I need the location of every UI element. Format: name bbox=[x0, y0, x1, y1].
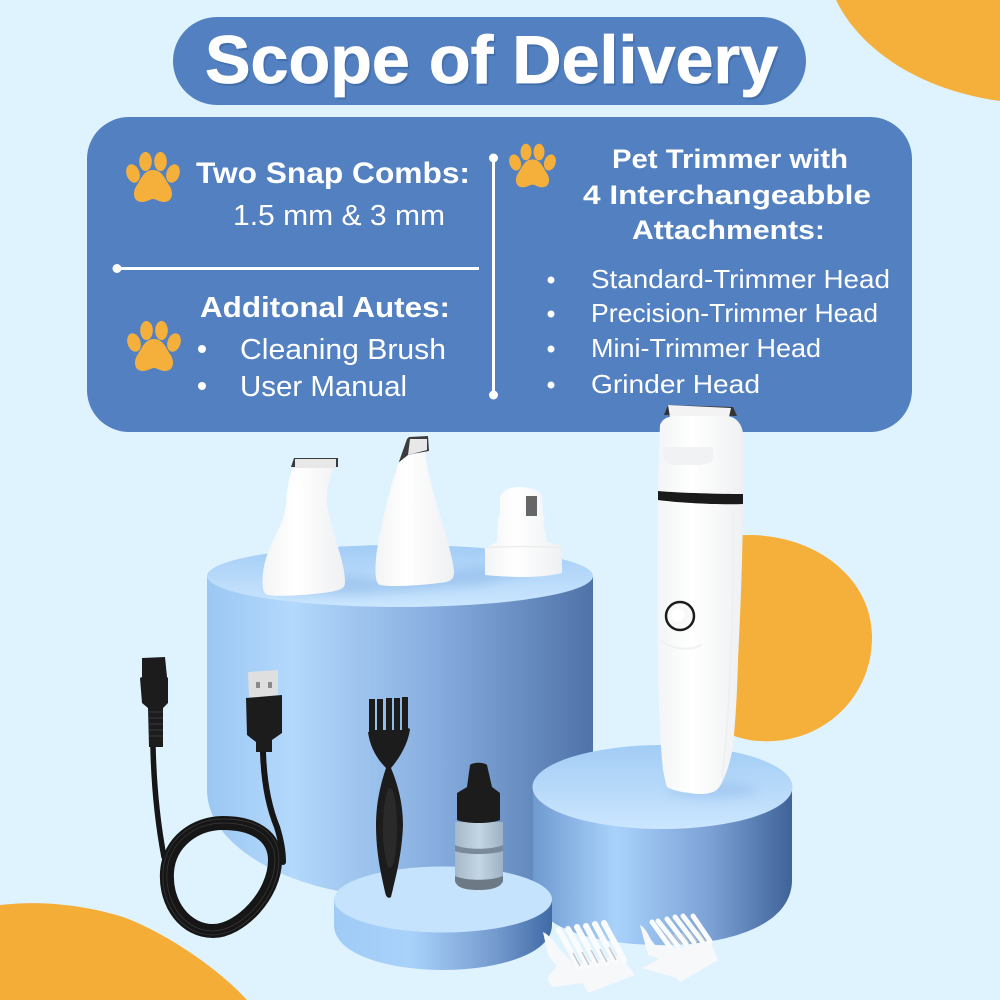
heading: additional items: Additonal Autes: bbox=[200, 292, 450, 324]
list: additional items: Cleaning Brush bbox=[240, 334, 446, 366]
heading: pet trimmer: Pet Trimmer with bbox=[612, 144, 848, 174]
trimmer black band bbox=[658, 491, 743, 504]
oil bottle bbox=[455, 763, 503, 890]
small pedestal bbox=[334, 866, 552, 970]
attachment: grinder head bbox=[484, 487, 562, 577]
medium pedestal bbox=[532, 745, 792, 945]
list: attachments bbox=[548, 264, 890, 399]
snap comb 1.5 mm bbox=[640, 916, 718, 982]
list: additional items bbox=[198, 334, 446, 403]
trimmer power button bbox=[660, 602, 702, 649]
snap comb 3 mm bbox=[543, 923, 635, 993]
list: attachments: Mini-Trimmer Head bbox=[591, 333, 821, 363]
text: comb sizes: 1.5 mm & 3 mm bbox=[233, 200, 445, 232]
panel: contents list bbox=[87, 117, 912, 432]
list: attachments: Grinder Head bbox=[591, 369, 760, 399]
decorative orange blob bottom left bbox=[0, 903, 247, 1000]
cleaning brush bbox=[368, 697, 410, 898]
list: additional items: User Manual bbox=[240, 371, 407, 403]
list: attachments: Standard-Trimmer Head bbox=[591, 264, 890, 294]
attachment: precision trimmer head bbox=[375, 436, 454, 586]
usb connector bbox=[246, 670, 282, 752]
heading: two snap combs: Two Snap Combs: bbox=[196, 157, 470, 190]
decorative orange circle bbox=[725, 535, 872, 741]
charging plug bbox=[140, 657, 168, 747]
trimmer head recess bbox=[663, 447, 713, 465]
list: attachments: Precision-Trimmer Head bbox=[591, 298, 878, 328]
icon: paw extras bbox=[125, 321, 183, 371]
large pedestal bbox=[207, 545, 593, 897]
trimmer body bbox=[657, 405, 743, 794]
attachment: standard trimmer head bbox=[263, 458, 345, 596]
charging cable bbox=[153, 747, 283, 935]
title: Scope of Delivery bbox=[205, 22, 778, 98]
icon: paw combs bbox=[124, 152, 182, 202]
title: Scope of Delivery bbox=[207, 24, 780, 100]
horizontal divider bbox=[112, 264, 479, 273]
heading: pet trimmer: Attachments: bbox=[632, 215, 825, 245]
vertical divider bbox=[489, 154, 498, 400]
trimmer side seam bbox=[722, 510, 733, 778]
decorative orange blob top right bbox=[836, 0, 1000, 101]
heading: pet trimmer: 4 Interchangeabble bbox=[583, 180, 871, 210]
icon: paw trimmer bbox=[507, 144, 558, 187]
heading: pet trimmer bbox=[583, 144, 871, 245]
title banner bbox=[173, 17, 806, 105]
